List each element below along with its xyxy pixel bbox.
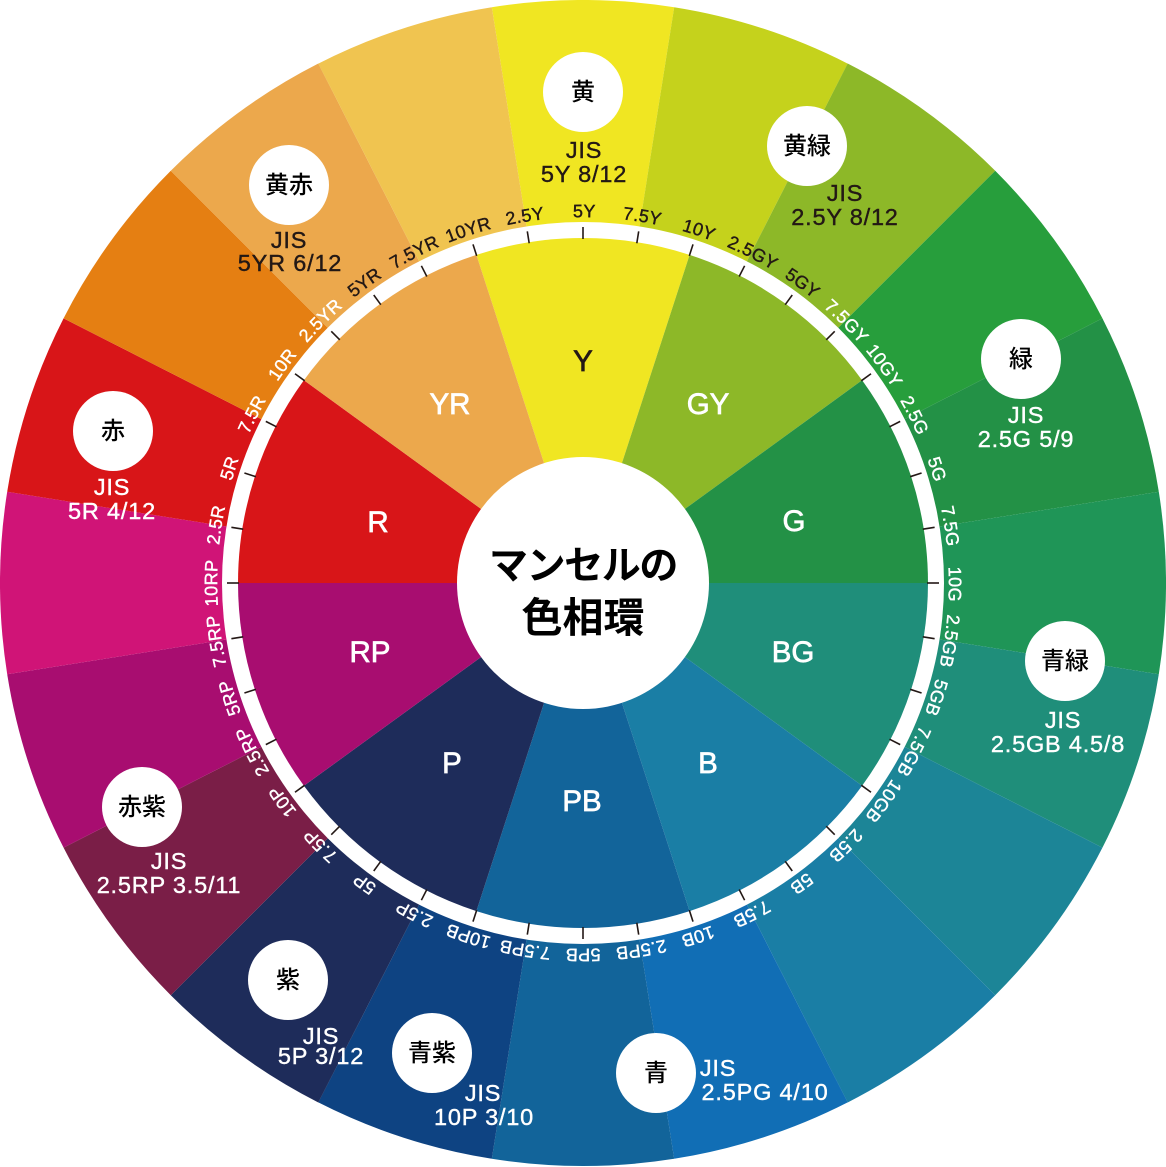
scale tick labels: 5P — [354, 878, 376, 895]
scale tick labels: 2.5Y — [506, 206, 543, 226]
scale tick marks — [227, 227, 939, 939]
hue letter labels: YR — [430, 388, 470, 421]
scale tick labels: 10YR — [446, 218, 492, 243]
scale tick labels: 5GY — [786, 268, 822, 296]
callout: 黄赤 — [238, 145, 342, 276]
centre title disc — [457, 457, 709, 709]
hue letter labels: R — [367, 506, 389, 539]
callout: 緑: 2.5G 5/9 — [978, 426, 1074, 452]
scale tick labels: 7.5P — [304, 833, 336, 864]
scale tick labels: 2.5B — [830, 828, 862, 862]
hue letter labels: RP — [350, 636, 390, 669]
hue letter labels: Y — [573, 345, 593, 378]
callout: 黄 — [541, 52, 627, 187]
scale tick labels: 7.5G — [941, 506, 959, 546]
scale tick labels: 2.5G — [900, 396, 928, 434]
callout: 青緑: 青緑 — [1041, 648, 1089, 675]
callout: 青紫: JIS — [465, 1080, 501, 1106]
callout: 黄緑: 2.5Y 8/12 — [791, 204, 899, 230]
callout: 黄: 5Y 8/12 — [541, 161, 627, 187]
scale tick labels: 2.5PB — [616, 940, 666, 960]
callout: 紫: 5P 3/12 — [278, 1043, 364, 1069]
callout: 青緑 — [991, 621, 1125, 757]
scale tick labels: 5PB — [566, 948, 600, 962]
hue letter labels: B — [698, 747, 718, 780]
scale tick labels: 7.5GY — [826, 298, 870, 341]
scale tick labels: 7.5YR — [388, 236, 440, 268]
callout: 赤: 5R 4/12 — [68, 498, 156, 524]
callout: 青: 青 — [644, 1060, 668, 1087]
scale tick labels: 7.5RP — [206, 616, 226, 668]
hue letter labels: GY — [687, 388, 730, 421]
callout: 黄: 黄 — [571, 79, 595, 106]
callout: 赤紫: 2.5RP 3.5/11 — [97, 872, 241, 898]
callout: 黄赤: 黄赤 — [265, 172, 313, 199]
callout: 青: 2.5PG 4/10 — [702, 1079, 828, 1105]
callout: 紫: 紫 — [276, 967, 300, 994]
callout: 緑: JIS — [1008, 402, 1044, 428]
scale tick labels: 5Y — [573, 204, 596, 218]
callout: 紫 — [248, 940, 364, 1069]
callout: 青緑: 2.5GB 4.5/8 — [991, 731, 1125, 757]
callout: 緑: 緑 — [1009, 346, 1033, 373]
scale tick labels: 2.5YR — [299, 300, 343, 343]
centre title disc: マンセルの — [489, 545, 677, 588]
scale tick labels — [204, 164, 962, 962]
scale tick labels: 5G — [928, 456, 946, 481]
white scale ring — [222, 222, 944, 944]
callout: 赤: 赤 — [101, 418, 125, 445]
scale tick labels: 10R — [270, 349, 297, 381]
scale tick labels: 2.5P — [396, 904, 434, 928]
callout: 黄緑: 黄緑 — [783, 133, 831, 160]
scale tick labels: 2.5R — [207, 506, 226, 545]
callout: 青 — [616, 1033, 828, 1113]
callout: 黄赤: JIS — [271, 227, 307, 253]
callout: 紫: JIS — [303, 1023, 339, 1049]
scale tick labels: 2.5GB — [940, 614, 960, 666]
callout: 黄緑 — [767, 106, 899, 230]
scale tick labels: 10G — [948, 568, 962, 600]
hue letter labels — [350, 345, 814, 818]
callout: 黄緑: JIS — [827, 180, 863, 206]
scale tick labels: 10PB — [446, 924, 490, 948]
scale tick labels: 10RP — [204, 560, 218, 606]
scale tick labels: 7.5GB — [898, 728, 932, 776]
callout: 青: JIS — [700, 1055, 736, 1081]
callout: 赤紫: 赤紫 — [118, 794, 166, 821]
scale tick labels: 5R — [220, 457, 239, 480]
callout: 青紫 — [392, 1013, 534, 1130]
hue letter labels: G — [783, 505, 805, 538]
scale tick labels: 10Y — [682, 220, 716, 240]
scale tick labels: 10P — [269, 790, 296, 816]
hue letter labels: BG — [772, 636, 814, 669]
scale tick labels: 7.5B — [734, 901, 772, 927]
hue letter labels: P — [442, 747, 462, 780]
callout: 赤紫 — [97, 767, 241, 898]
callout: 黄赤: 5YR 6/12 — [238, 250, 342, 276]
scale tick labels: 10GB — [866, 779, 900, 822]
inner hue wheel: 10 wedges — [222, 238, 944, 928]
scale tick labels: 2.5RP — [236, 730, 270, 776]
scale tick labels: 10GY — [866, 344, 904, 384]
callout: 赤: JIS — [94, 474, 130, 500]
scale tick labels: 7.5R — [238, 396, 266, 432]
hue letter labels: PB — [562, 785, 602, 818]
scale tick labels: 10B — [682, 926, 714, 946]
scale tick labels: 5RP — [219, 682, 240, 716]
scale tick labels: 7.5Y — [624, 206, 662, 225]
callout: 赤紫: JIS — [151, 848, 187, 874]
callout: 青紫: 青紫 — [408, 1040, 456, 1067]
scale tick labels: 5B — [791, 874, 814, 894]
callout: 青緑: JIS — [1045, 707, 1081, 733]
scale tick labels: 5YR — [347, 268, 382, 296]
callout: 青紫: 10P 3/10 — [434, 1104, 534, 1130]
callout: 赤 — [68, 391, 156, 524]
centre title disc: 色相環 — [522, 595, 644, 641]
callout: 黄: JIS — [566, 137, 602, 163]
scale tick labels: 2.5GY — [727, 236, 780, 268]
scale tick labels: 7.5PB — [500, 940, 550, 960]
callout: 緑 — [978, 319, 1074, 452]
scale tick labels: 5GB — [926, 680, 948, 716]
